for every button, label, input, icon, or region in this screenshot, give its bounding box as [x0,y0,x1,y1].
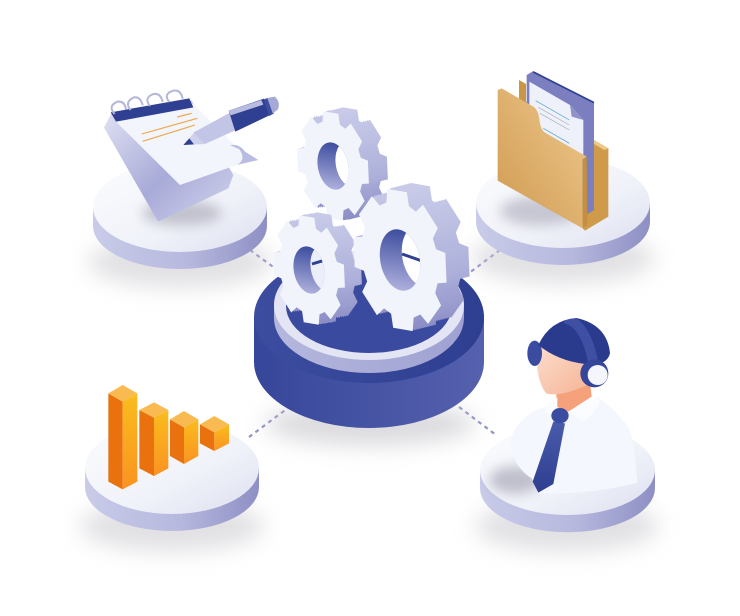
ring [274,305,464,373]
platform: bottom left disc [80,422,264,552]
shirt [510,397,637,494]
bar 4 [200,416,229,451]
ear cup [580,359,608,387]
notepad sheet [116,103,242,185]
gear: left [274,212,362,325]
hair [538,318,610,364]
collar [544,396,599,422]
central hub shadow [265,402,475,446]
gear: large right [354,183,470,332]
white document [529,82,583,158]
headband [565,318,594,367]
notepad body [104,101,233,221]
folder right frame [583,140,608,231]
central hub: blue cylinder [254,250,484,428]
illustration: gears hub with four platforms [78,71,660,558]
connector: top right [465,250,500,276]
gear: top [297,107,388,220]
connector: bottom right [459,407,496,435]
document lines [536,101,569,143]
blue binder [527,71,594,217]
orange text lines [142,113,197,141]
neck [556,382,592,412]
bar 3 [170,411,198,464]
page curl [230,145,258,165]
left ear pad [527,341,542,366]
folder back [519,80,608,230]
icon: bar chart [108,385,229,489]
pen [183,97,279,145]
folder front [498,88,587,228]
connector: bottom left [249,408,288,437]
icon: support agent with headset [510,318,637,494]
face [537,347,587,394]
notepad binding strip [111,98,193,122]
bar 1 [108,385,137,489]
platform: top right disc [471,158,655,284]
icon: folder with documents [498,71,608,231]
platform: bottom right disc [475,425,659,552]
connector: top left [250,250,276,269]
tie [533,408,569,493]
bar 2 [139,402,168,476]
spiral rings [112,90,183,114]
icon: notepad and pen [104,90,279,221]
platform: top left disc [88,162,272,288]
